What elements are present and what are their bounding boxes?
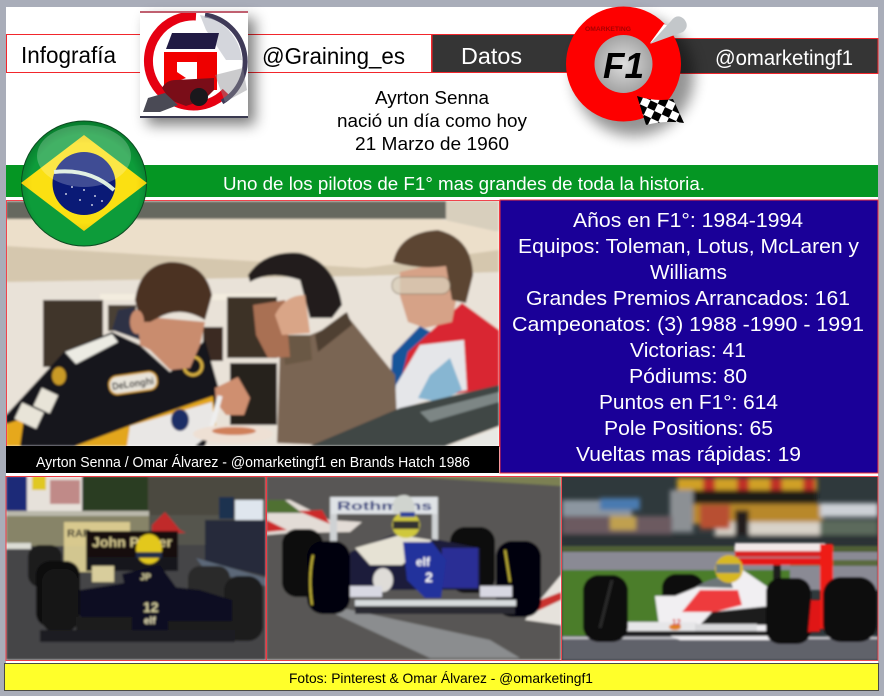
photo: Williams FW16 Rothmans: Rothmans	[337, 499, 433, 513]
footer credits: Fotos: Pinterest & Omar Álvarez - @omarketingf1	[289, 670, 593, 686]
F1 logo: OMARKETING	[585, 26, 631, 33]
rear wing	[86, 531, 178, 557]
green banner	[6, 165, 878, 197]
rear wing	[735, 543, 825, 551]
helmet	[136, 534, 162, 564]
second car	[28, 545, 62, 587]
photo caption	[6, 446, 499, 473]
middle man face and hair	[253, 300, 290, 358]
photo: McLaren MP4/4: 12	[672, 618, 681, 627]
chassis	[350, 535, 480, 590]
rear tyres	[766, 578, 811, 644]
middle man sweater	[277, 313, 397, 446]
tyres	[36, 561, 80, 627]
birth date text	[337, 88, 527, 154]
helmet	[392, 512, 420, 538]
photo: Lotus 98T John Player: elf	[144, 616, 156, 627]
green banner: Uno de los pilotos de F1° mas grandes de toda la historia.	[223, 174, 705, 194]
frame: photo 3	[562, 476, 878, 660]
header bar: @Graining_es: @Graining_es	[262, 43, 405, 69]
birth date text: 21 Marzo de 1960	[355, 134, 509, 154]
body	[655, 568, 772, 640]
header bar: Datos: Datos	[461, 43, 522, 69]
main photo: Senna and Omar Álvarez: DeLonghi	[112, 376, 155, 393]
car roof	[310, 385, 499, 446]
rear wing	[330, 497, 337, 563]
birth date text: Ayrton Senna	[375, 88, 490, 108]
photo: McLaren MP4/4	[562, 476, 878, 660]
stats panel: Puntos en F1°: 614	[599, 391, 778, 414]
middle man fist	[275, 295, 310, 335]
blue jacket	[390, 325, 432, 388]
F1 logo	[574, 16, 694, 136]
Senna hood	[112, 307, 140, 340]
icon: Brazil flag sphere	[21, 121, 147, 246]
photo: Lotus 98T John Player	[6, 476, 266, 660]
stats panel	[500, 200, 878, 473]
Senna face and hair	[138, 318, 205, 370]
stats panel: Victorias: 41	[630, 339, 746, 362]
photo: Lotus 98T John Player: John Player	[92, 534, 173, 550]
frame: photo 1	[6, 476, 266, 660]
icon: checkered flag	[637, 96, 684, 125]
stats panel: Williams	[650, 261, 727, 284]
header bar: Infografía	[6, 34, 140, 72]
front wing	[350, 586, 382, 597]
stats panel: Equipos: Toleman, Lotus, McLaren y	[518, 235, 860, 258]
photo: Lotus 98T John Player: JP	[140, 572, 151, 582]
photo: Williams FW16 Rothmans	[266, 476, 561, 660]
stats panel: Años en F1°: 1984-1994	[573, 209, 803, 232]
stats panel: Pole Positions: 65	[604, 417, 773, 440]
photo: Williams FW16 Rothmans: elf	[416, 555, 431, 569]
Senna suit	[6, 332, 222, 446]
stats panel: Grandes Premios Arrancados: 161	[526, 287, 850, 310]
header bar: @omarketingf1	[670, 38, 878, 74]
frame: photo 2	[266, 476, 562, 660]
F1 logo: F1	[603, 45, 644, 86]
mid tyre	[661, 573, 704, 596]
front tyre	[583, 575, 628, 642]
Graining logo	[140, 11, 255, 125]
right man jacket	[400, 303, 499, 395]
photo: Lotus 98T John Player: 12	[143, 599, 159, 615]
header bar: @omarketingf1: @omarketingf1	[715, 47, 853, 70]
header bar: Infografía: Infografía	[21, 42, 116, 68]
photo: Lotus 98T John Player: RAR	[67, 528, 91, 540]
birth date text: nació un día como hoy	[337, 111, 527, 131]
header bar: Datos	[432, 34, 577, 72]
right man face	[400, 262, 458, 328]
rear tyres	[282, 529, 323, 597]
main photo: Senna and Omar Álvarez	[6, 200, 499, 446]
stats panel: Campeonatos: (3) 1988 -1990 - 1991	[512, 313, 864, 336]
footer credits	[4, 664, 878, 690]
photo frame	[6, 200, 500, 446]
photo: Williams FW16 Rothmans: 2	[425, 569, 433, 585]
chassis	[80, 582, 232, 630]
hand and plate	[215, 377, 250, 415]
stats panel: Vueltas mas rápidas: 19	[576, 443, 801, 466]
header bar: @Graining_es	[248, 34, 432, 72]
stats panel: Pódiums: 80	[629, 365, 747, 388]
helmet	[715, 555, 743, 583]
front tyres	[307, 541, 350, 614]
photo caption: Ayrton Senna / Omar Álvarez - @omarketingf1 en Brands Hatch 1986	[36, 454, 470, 471]
